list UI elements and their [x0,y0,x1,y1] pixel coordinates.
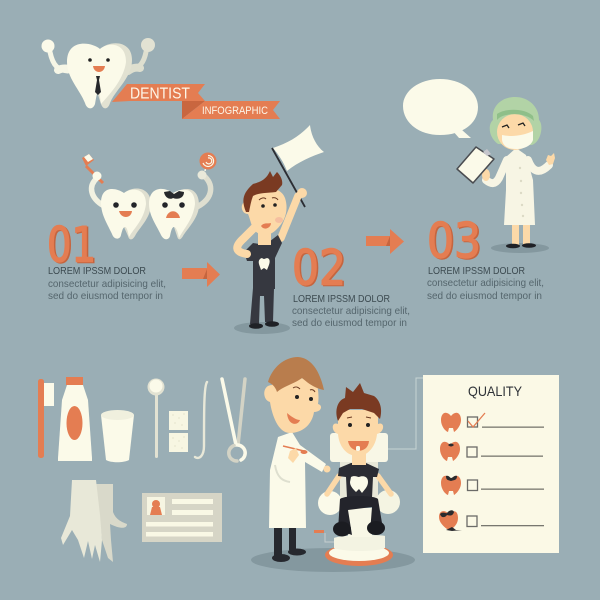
dental tools [38,377,245,562]
toothbrush [38,379,54,458]
hair [336,383,381,421]
coat [269,432,326,528]
arms [327,476,391,494]
mascot arms [50,52,146,71]
step 03 text: LOREM IPSSM DOLOR [428,265,525,277]
step 01 teeth illustration [82,152,216,239]
dental probe [195,382,207,458]
hat [490,97,541,145]
step 02 text: consectetur adipisicing elit, [292,305,410,317]
coat arms [486,160,549,183]
shadow [234,322,290,334]
ribbon: infographic [182,101,280,119]
legs [512,224,530,246]
title text: dentist: DENTIST [130,86,190,102]
legs [338,496,382,535]
neck [352,452,366,465]
arrow 1 [182,262,220,287]
neck [258,230,271,245]
face [259,198,283,229]
dentist [264,357,330,562]
step number 02: 02 [294,242,348,298]
step 02 text [292,293,410,329]
step 02 boy with flag [234,125,324,334]
head [242,188,287,235]
mask [502,131,533,149]
head [264,375,321,433]
step 01 text: consectetur adipisicing elit, [48,278,166,290]
shoes [333,521,385,536]
clipboard [457,147,494,183]
dentist and patient scene [251,357,415,572]
hand [324,466,330,472]
quality checklist card [423,375,559,553]
hair [268,357,324,392]
face [287,387,315,424]
step 02 text: sed do eiusmod tempor in [292,317,407,329]
speech bubble [403,79,478,138]
step 03 text: sed do eiusmod tempor in [427,290,542,302]
mascot tooth [67,43,132,108]
flag [273,125,324,171]
flag pole [272,148,305,207]
shirt tooth logo [259,258,270,270]
arm with toothbrush [82,154,104,206]
floor shadow [251,548,415,572]
gauze squares [169,411,188,452]
arm on cheek [237,228,254,254]
step 02 text: LOREM IPSSM DOLOR [293,293,390,305]
face [497,114,533,150]
step number 02: 02 [292,240,346,296]
eyes [502,123,525,128]
gloves [61,480,127,562]
step number 01: 01 [47,218,96,274]
row 1 [441,413,544,432]
fist [297,188,307,198]
step number 03: 03 [428,214,482,270]
arm with lollipop [197,152,216,207]
row 4 [439,510,544,531]
legs [249,288,279,329]
shirt tooth logo [350,476,368,493]
shadow [491,243,549,253]
coat [504,148,535,225]
instrument [283,446,308,463]
shoes [506,243,536,248]
step 03 text [427,265,544,302]
patient [327,383,391,536]
step 03 nurse [457,97,555,253]
waving hand [546,153,555,165]
step 03 text: consectetur adipisicing elit, [427,277,544,289]
hat band [497,110,534,121]
step 01 text: LOREM IPSSM DOLOR [48,265,146,277]
id card [142,493,222,542]
forceps [222,379,245,461]
head [333,410,383,456]
raised arm [281,196,298,238]
step 01 text: sed do eiusmod tempor in [48,290,163,302]
step number 03: 03 [427,214,481,270]
title text: infographic: INFOGRAPHIC [202,105,268,117]
decayed tooth [149,189,199,239]
title banner with tooth mascot [42,38,280,119]
face [347,417,371,451]
shirt [244,235,282,289]
card title: QUALITY [468,383,523,399]
dental chair [314,433,400,566]
dental mirror [148,378,164,458]
arrow 2 [366,229,404,254]
row 2 [440,442,543,461]
connector line [388,378,423,449]
step 01 text [48,265,166,302]
toothpaste [58,377,92,461]
ribbon: dentist [112,84,205,119]
step number 01: 01 [48,218,98,274]
hand on clipboard [482,169,490,181]
row 3 [441,476,544,495]
hair [243,171,282,212]
coat buttons [519,167,524,217]
shirt [338,463,379,498]
legs [274,528,296,556]
cup [101,410,134,462]
happy tooth [101,188,151,239]
mascot hands [42,38,155,52]
shoes [272,548,306,562]
